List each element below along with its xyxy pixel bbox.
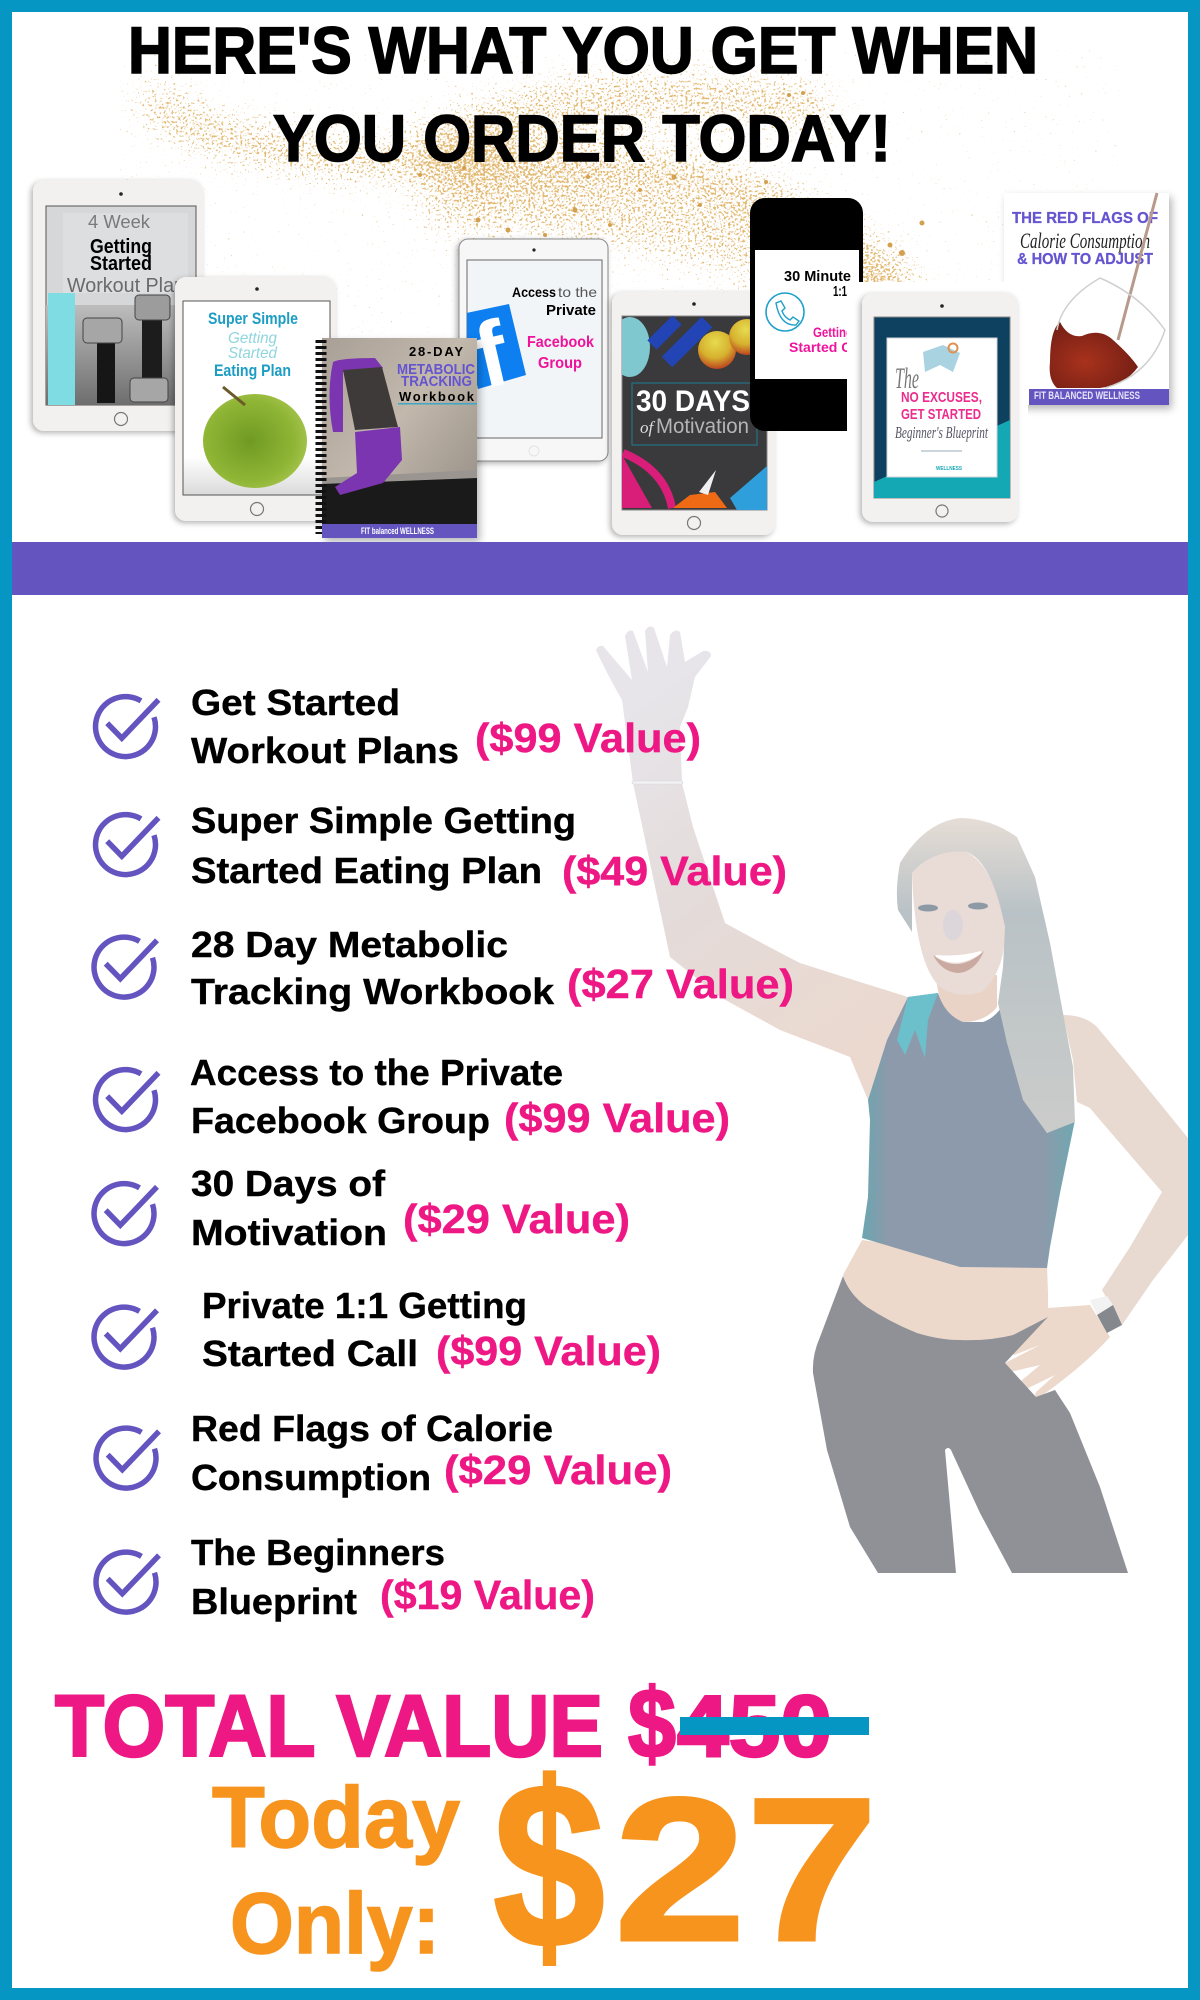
tablet: facebook group: f (465, 302, 518, 408)
item name (191, 1408, 553, 1498)
hip arm (1063, 1015, 1188, 1325)
item name (191, 1163, 387, 1253)
tablet: facebook group: to the (558, 284, 597, 300)
raised hand and arm (596, 627, 908, 1100)
neck (936, 975, 997, 1022)
phone: 30 minute 1:1 getting started call: 1:1 (833, 283, 847, 300)
icon: check (96, 1552, 159, 1612)
item name (190, 1052, 563, 1141)
tablet: super simple eating plan: Eating Plan (214, 361, 291, 380)
tablet: facebook group: Facebook (527, 334, 594, 351)
tablet: beginner's blueprint with white halo: Beginner's Blueprint (895, 423, 989, 442)
book: red flags of calorie consumption: & HOW TO ADJUST (1017, 251, 1153, 268)
total value: 450 (677, 1678, 832, 1775)
tablet: super simple eating plan: Super Simple (208, 309, 298, 328)
item name: Super Simple Getting (191, 800, 576, 841)
price: $ (493, 1734, 605, 1998)
item name (191, 1532, 445, 1622)
total value (55, 1668, 869, 1778)
item name: Private 1:1 Getting (202, 1285, 527, 1326)
phone: 30 minute 1:1 getting started call (750, 198, 867, 431)
workbook: 28-day metabolic tracking: 28-DAY (409, 344, 463, 359)
price: 27 (614, 1756, 878, 1984)
item name: Access to the Private (190, 1052, 563, 1093)
gold glitter splash (150, 91, 924, 320)
tablet: beginner's blueprint with white halo (847, 282, 1028, 538)
workbook: 28-day metabolic tracking: TRACKING (401, 373, 472, 390)
tablet: super simple eating plan: Started (228, 345, 278, 362)
today only label: Today (212, 1770, 460, 1866)
icon: check (94, 937, 157, 997)
icon: check (96, 815, 158, 875)
hand on hip (1003, 1305, 1110, 1398)
hair (897, 818, 1075, 1133)
phone: 30 minute 1:1 getting started call: Getting (813, 324, 853, 340)
item name: The Beginners (191, 1532, 445, 1573)
tablet: 4 week workout plan (33, 180, 203, 431)
list item: eating plan (96, 800, 787, 894)
value: ($27 Value) (567, 961, 794, 1007)
tablet: 30 days of motivation: 30 DAYS (636, 385, 750, 418)
tablet: 4 week workout plan: Started (90, 253, 152, 275)
title: HERE'S WHAT YOU GET WHEN (128, 13, 1038, 87)
tablet: 4 week workout plan: Workout Plan (67, 275, 185, 297)
tank top (862, 993, 1075, 1268)
icon: check (96, 1070, 158, 1130)
item name: 28 Day Metabolic (191, 924, 508, 965)
item name: Facebook Group (191, 1100, 490, 1141)
strikethrough bar (680, 1717, 869, 1735)
item name: Workout Plans (191, 730, 459, 771)
workbook: 28-day metabolic tracking (321, 338, 477, 538)
workbook: 28-day metabolic tracking: FIT balanced WELLNESS (361, 526, 434, 536)
value: ($29 Value) (403, 1196, 630, 1242)
tablet: super simple eating plan (175, 277, 336, 521)
list item: facebook group (96, 1052, 730, 1141)
item name: Blueprint (191, 1581, 357, 1622)
book: red flags of calorie consumption (1004, 193, 1169, 405)
list item: motivation (94, 1163, 630, 1253)
tablet: facebook group: Private (546, 302, 596, 319)
item name: Get Started (191, 682, 400, 723)
smile (933, 951, 984, 973)
leggings (813, 1276, 1128, 1573)
bracelet (632, 781, 683, 784)
icon: check (94, 1184, 157, 1244)
item name: Started Call (202, 1333, 418, 1374)
tank shoulder highlight (897, 993, 938, 1058)
book: red flags of calorie consumption: THE RED FLAGS OF (1012, 210, 1158, 227)
list item: tracking workbook (94, 924, 794, 1012)
icon: check (96, 1428, 159, 1488)
workbook: 28-day metabolic tracking: Workbook (399, 389, 475, 404)
icon: check (94, 1307, 157, 1367)
tablet: 30 days of motivation: of (640, 418, 656, 437)
item name: Started Eating Plan (191, 850, 542, 891)
tablet: beginner's blueprint with white halo: The (895, 362, 919, 395)
title (128, 13, 1038, 175)
phone: 30 minute 1:1 getting started call: Started Call (789, 339, 867, 355)
workbook: 28-day metabolic tracking: METABOLIC (397, 361, 475, 378)
total value: $ (628, 1668, 676, 1778)
midriff (843, 1240, 1048, 1340)
title: YOU ORDER TODAY! (273, 101, 891, 175)
item name (191, 924, 555, 1012)
item name: Tracking Workbook (191, 971, 555, 1012)
tablet: facebook group: Group (538, 355, 582, 372)
purple divider band (12, 542, 1188, 595)
list item: private call (94, 1285, 661, 1374)
item name: Red Flags of Calorie (191, 1408, 553, 1449)
value: ($99 Value) (504, 1095, 730, 1141)
value: ($29 Value) (444, 1447, 672, 1493)
list item: blueprint (96, 1532, 595, 1622)
item name (191, 800, 576, 891)
photo: woman waving (596, 627, 1188, 1573)
price (493, 1734, 878, 1998)
book: red flags of calorie consumption: FIT BALANCED WELLNESS (1034, 390, 1140, 402)
tablet: beginner's blueprint with white halo: WELLNESS (936, 466, 963, 472)
total value: TOTAL VALUE (55, 1678, 603, 1775)
watch (1090, 1296, 1122, 1333)
item name: 30 Days of (191, 1163, 386, 1204)
value: ($49 Value) (562, 848, 787, 894)
tablet: 30 days of motivation: Motivation (656, 415, 749, 438)
value: ($99 Value) (436, 1328, 661, 1374)
tablet: 30 days of motivation (610, 292, 775, 535)
tablet: 4 week workout plan: Getting (90, 236, 152, 258)
list item: red flags (96, 1408, 672, 1498)
item name: Motivation (191, 1212, 387, 1253)
tablet: beginner's blueprint with white halo: NO EXCUSES, (901, 389, 982, 406)
value: ($99 Value) (475, 715, 701, 761)
value: ($19 Value) (380, 1572, 595, 1618)
face (912, 851, 1005, 995)
phone: 30 minute 1:1 getting started call: 30 Minute (784, 268, 851, 285)
list item: workout plans (96, 682, 701, 771)
tablet: beginner's blueprint with white halo: GET STARTED (901, 406, 981, 423)
eyes and nose (918, 902, 988, 940)
tablet: super simple eating plan: Getting (228, 330, 277, 347)
item name: Consumption (191, 1457, 431, 1498)
tablet: facebook group (459, 239, 608, 461)
icon: check (96, 697, 158, 757)
today only label: Only: (230, 1876, 440, 1972)
today only label (212, 1770, 460, 1972)
item name (191, 682, 459, 771)
tablet: 4 week workout plan: 4 Week (88, 212, 151, 232)
tablet: facebook group: Access (512, 284, 556, 300)
item name (202, 1285, 527, 1374)
